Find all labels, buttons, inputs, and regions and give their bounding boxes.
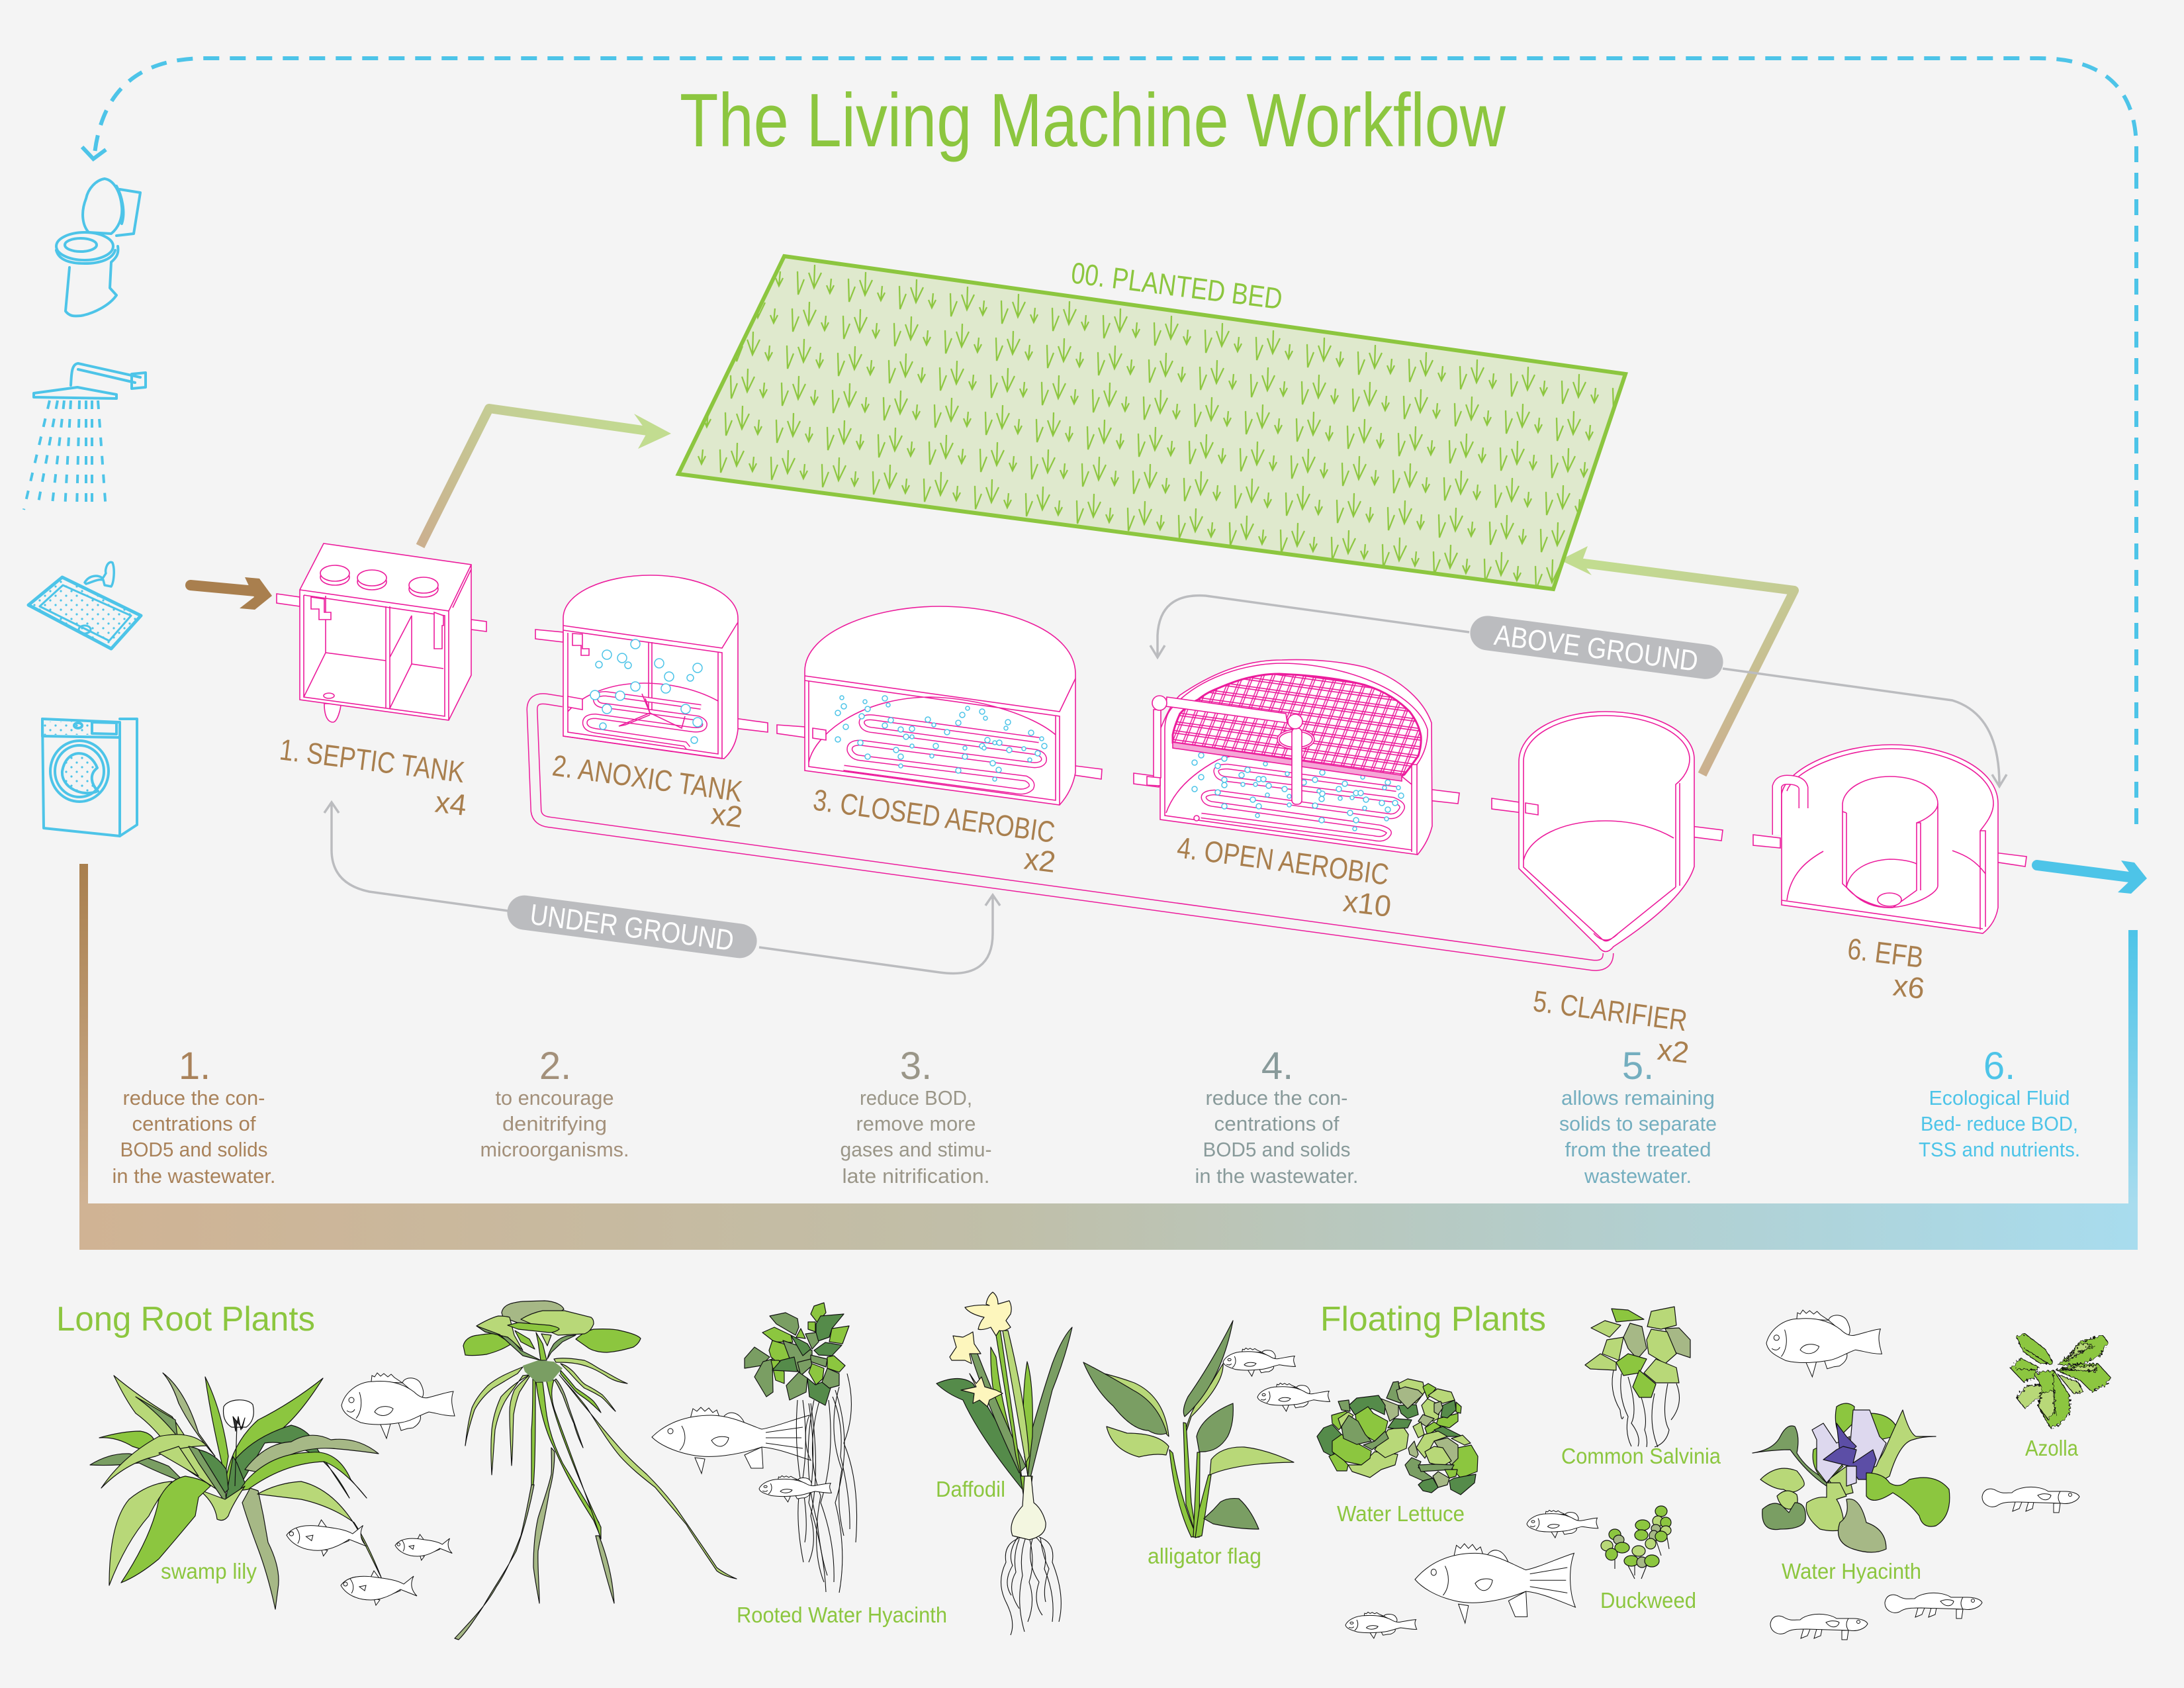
step 3: 3. (900, 1045, 932, 1088)
step 2: to encourage (495, 1086, 614, 1109)
step 5: wastewater. (1584, 1164, 1692, 1188)
arrow: clarifier to planted bed (1560, 546, 1794, 774)
step 1: reduce the con- (123, 1086, 265, 1109)
tank 5: clarifier (1492, 712, 1723, 1070)
plant: water hyacinth (1752, 1403, 1950, 1552)
step 3: gases and stimu- (841, 1138, 991, 1161)
step 4: reduce the con- (1206, 1086, 1347, 1109)
tank 6 label: 6. EFB (1846, 931, 1925, 974)
fish: sunfish small lower (1527, 1510, 1598, 1538)
tank 2 quantity: x2 (709, 797, 745, 834)
step 4 (1195, 1045, 1358, 1188)
hyacinth roots (796, 1374, 857, 1593)
label: alligator flag: alligator flag (1148, 1544, 1261, 1568)
tank 4 coil (1201, 767, 1402, 839)
dashed recycled water return arrow (82, 58, 2136, 824)
plant: alligator flag (1083, 1321, 1294, 1538)
step 3: remove more (856, 1112, 976, 1135)
tank 3 label: 3. CLOSED AEROBIC (811, 782, 1057, 849)
fish: killifish left (1770, 1614, 1868, 1640)
tank 3 coil (844, 718, 1044, 792)
under ground pill: UNDER GROUND (528, 898, 736, 957)
label: water hyacinth: Water Hyacinth (1782, 1559, 1921, 1583)
tank 5 label: 5. CLARIFIER (1531, 984, 1689, 1037)
tank 2 label: 2. ANOXIC TANK (551, 748, 745, 808)
label: swamp lily: swamp lily (161, 1559, 257, 1583)
tank 2 coil (585, 694, 705, 748)
label: rooted water hyacinth: Rooted Water Hyacinth (737, 1603, 947, 1627)
icon: shower (24, 363, 146, 510)
step 1: in the wastewater. (113, 1164, 275, 1188)
label: common salvinia: Common Salvinia (1561, 1444, 1721, 1468)
fish: killifish right (1982, 1487, 2079, 1513)
step 5: solids to separate (1559, 1112, 1717, 1135)
tank 4 aeration pipes (1154, 710, 1161, 778)
step 4: in the wastewater. (1195, 1164, 1358, 1188)
label: azolla: Azolla (2025, 1436, 2079, 1460)
step 6: Bed- reduce BOD, (1921, 1112, 2078, 1135)
icon: toilet (56, 179, 140, 316)
tank 3 quantity: x2 (1023, 842, 1058, 879)
step 3 (841, 1045, 991, 1188)
fish: killifish middle (1885, 1593, 1982, 1618)
step 2: denitrifying (502, 1112, 607, 1135)
tank 1: septic tank (277, 543, 486, 822)
step 1: BOD5 and solids (120, 1138, 267, 1161)
tank 4 quantity: x10 (1342, 884, 1393, 923)
tank 4 planted grid (1173, 674, 1421, 776)
heading: long root plants: Long Root Plants (56, 1300, 315, 1338)
fish: tetra (287, 1520, 367, 1556)
tank 6 inner cylinder (1843, 776, 1938, 908)
step 6 (1919, 1045, 2080, 1161)
plant: duckweed (1601, 1506, 1671, 1579)
tank 2: anoxic tank (535, 575, 768, 834)
step 4: 4. (1261, 1045, 1293, 1088)
step 6: Ecological Fluid (1929, 1086, 2070, 1109)
step 2: microorganisms. (480, 1138, 629, 1161)
label: duckweed: Duckweed (1600, 1588, 1696, 1613)
label: daffodil: Daffodil (936, 1477, 1005, 1501)
fish: sunfish right (1766, 1310, 1882, 1377)
fish: tetra lower (341, 1571, 417, 1605)
step 2: 2. (539, 1045, 571, 1088)
label: water lettuce: Water Lettuce (1337, 1501, 1465, 1526)
plant: daffodil (936, 1292, 1072, 1635)
fish: small bass (759, 1476, 831, 1502)
step 1 (113, 1045, 275, 1188)
step 1: centrations of (132, 1112, 256, 1135)
step 3: reduce BOD, (860, 1086, 972, 1109)
planted bed label: 00. PLANTED BED (1069, 256, 1285, 316)
brown inflow arrow (191, 577, 272, 610)
step 6: TSS and nutrients. (1919, 1138, 2080, 1161)
step 5: allows remaining (1561, 1086, 1715, 1109)
step 4: centrations of (1214, 1112, 1340, 1135)
above ground pill: ABOVE GROUND (1492, 619, 1700, 678)
plant: rooted water hyacinth (745, 1303, 857, 1593)
planted bed (678, 256, 1625, 589)
step 4: BOD5 and solids (1203, 1138, 1350, 1161)
icon: sink (28, 562, 141, 649)
step 2 (480, 1045, 629, 1161)
fish: sunfish pair upper (1223, 1348, 1295, 1376)
fish: sunfish pair lower (1257, 1383, 1330, 1411)
arrow: septic to planted bed (420, 408, 671, 546)
plant: swamp lily (90, 1373, 381, 1609)
fish: bass lower (1415, 1544, 1575, 1623)
tank 1 label: 1. SEPTIC TANK (278, 732, 467, 789)
right gradient bar (2128, 930, 2138, 1205)
step 5: from the treated (1565, 1138, 1711, 1161)
tank 1 quantity: x4 (433, 785, 469, 822)
above ground route (1150, 596, 2007, 786)
plant: common salvinia (1585, 1307, 1690, 1447)
tank 6 quantity: x6 (1891, 968, 1927, 1006)
step 5 (1559, 1045, 1717, 1188)
step 3: late nitrification. (842, 1164, 990, 1188)
fish: tetra small (395, 1534, 452, 1560)
plant: azolla (2011, 1334, 2111, 1428)
tank 5 quantity: x2 (1656, 1033, 1691, 1070)
tank 6 inlet pipes (1777, 780, 1803, 835)
icon: washing machine (42, 719, 137, 836)
cyan outflow arrow (2037, 861, 2147, 894)
left gradient bar (79, 864, 88, 1205)
heading: floating plants: Floating Plants (1320, 1300, 1546, 1338)
tank 3: closed aerobic (777, 606, 1102, 879)
fish: sunfish (341, 1373, 455, 1438)
daffodil roots (1001, 1537, 1061, 1635)
tank 6: EFB (1753, 745, 2026, 1006)
under ground route (324, 802, 1000, 973)
step 1: 1. (179, 1045, 210, 1088)
title: The Living Machine Workflow (680, 79, 1506, 163)
fish: sunfish bottom (1345, 1612, 1417, 1638)
plant: frogbit (455, 1301, 737, 1640)
tank 4: open aerobic (1134, 660, 1459, 923)
tank 4 label: 4. OPEN AEROBIC (1175, 830, 1391, 892)
plant: water lettuce (1317, 1379, 1478, 1495)
step 6: 6. (1983, 1045, 2015, 1088)
fish: bass (652, 1407, 811, 1474)
sludge return pipe (532, 699, 1608, 965)
bottom gradient band (79, 1203, 2138, 1250)
step 5: 5. (1622, 1045, 1654, 1088)
